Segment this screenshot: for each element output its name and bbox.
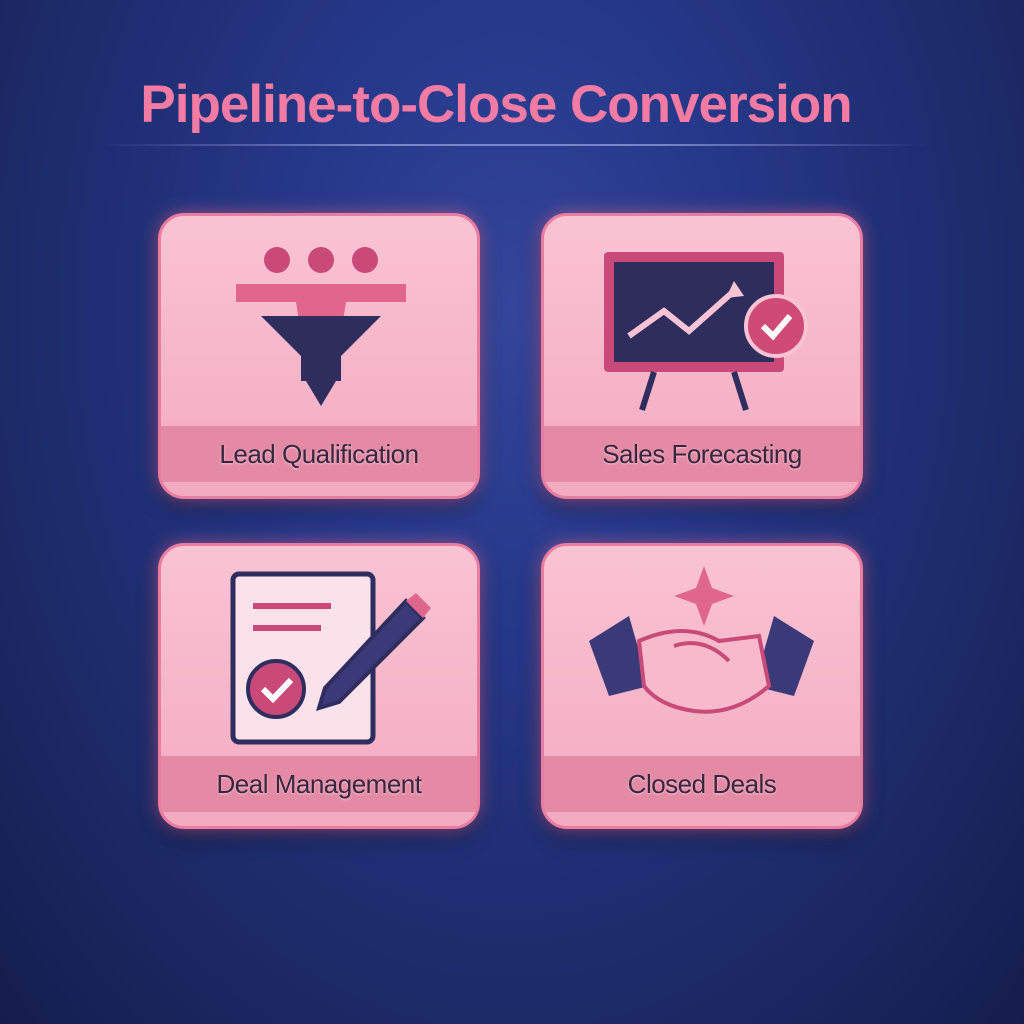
panel: closed deals (541, 543, 863, 829)
icon: handshake (589, 566, 814, 714)
label: Sales Forecasting (602, 438, 802, 468)
title: Pipeline-to-Close Conversion (140, 75, 852, 134)
panel: deal management (158, 543, 480, 829)
label (544, 756, 860, 812)
panel: lead qualification (158, 213, 480, 499)
label (161, 756, 477, 812)
label (544, 426, 860, 482)
icon: chart board (604, 252, 808, 411)
label: Deal Management (217, 768, 421, 798)
panel: sales forecasting (541, 213, 863, 499)
label: Lead Qualification (219, 438, 419, 468)
icon: funnel (236, 247, 406, 406)
icon: document and pencil (230, 572, 431, 744)
label: Closed Deals (628, 768, 776, 798)
label (161, 426, 477, 482)
